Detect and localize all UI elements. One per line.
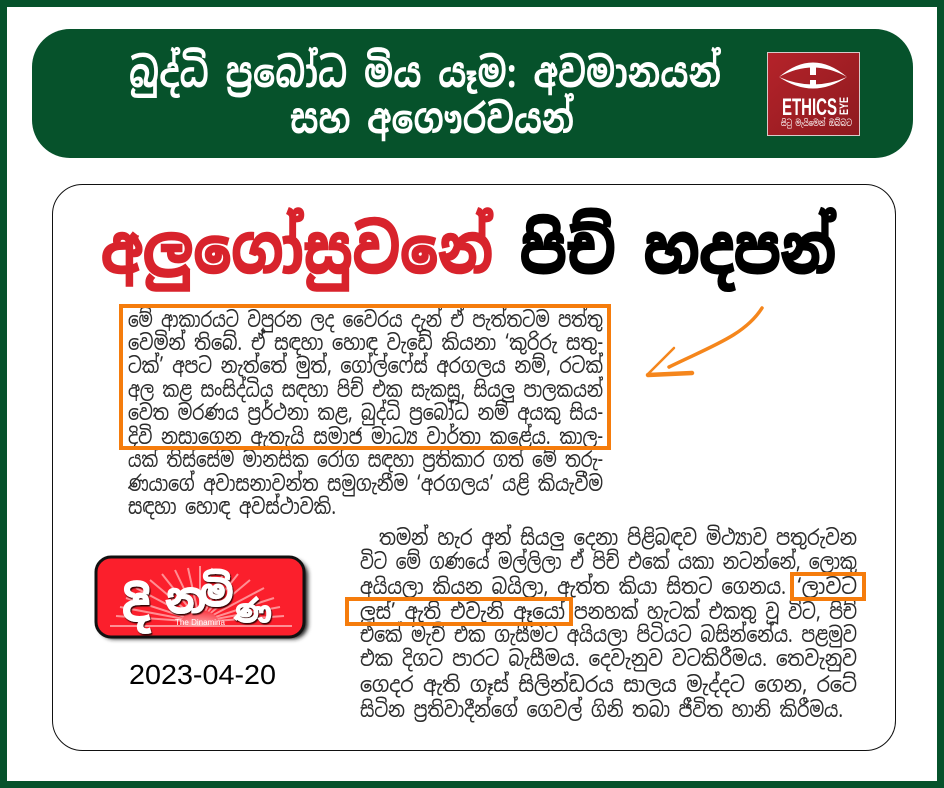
first article paragraph: යක් තිස්සේම මානසික රෝග සඳහා ප්‍රතිකාර ගත් මේ තරු- xyxy=(128,446,603,474)
second article paragraph: ‘ලාවට xyxy=(797,574,857,601)
main panel xyxy=(52,184,896,750)
logo: Ethics Eye: EYE xyxy=(837,97,851,115)
newspaper logo: Dinamina: දි xyxy=(122,575,151,635)
first article paragraph: මේ ආකාරයට වපුරන ලද වෛරය දැන් ඒ පැත්තටම පත්තු xyxy=(128,306,603,334)
second article paragraph: සිටින ප්‍රතිවාදීන්ගේ ගෙවල් ගිනි තබා ජීවිත හානි කිරීමය. xyxy=(360,696,843,724)
logo: Ethics Eye: සිටු මැයිමෙන් ඔබ්බට xyxy=(781,117,852,129)
second article paragraph: එක දිගට පාරට බැසීමය. දෙවැනුව වටකිරීමය. තෙවැනුව xyxy=(360,645,857,673)
second article paragraph: තමන් හැර අන් සියලු දෙනා පිළිබඳව මිථ්‍යාව පතුරුවන xyxy=(379,524,857,552)
date: 2023-04-20 xyxy=(129,659,276,690)
second article paragraph: ගෙදර ඇති ගෑස් සිලින්ඩරය සාලය මැද්දට ගෙන, රටේ xyxy=(360,671,857,699)
headline: අලුගෝසුවනේ xyxy=(101,207,493,293)
highlight box around first paragraph xyxy=(121,306,609,448)
newspaper logo: Dinamina: මි xyxy=(200,568,233,618)
newspaper logo: Dinamina: The Dinamina xyxy=(175,618,226,627)
first article paragraph: වෙමින් තිබේ. ඒ සඳහා හොඳ වැඩේ කියනා ‘කුරිරු සතු- xyxy=(128,329,603,357)
first article paragraph xyxy=(127,306,604,521)
second article paragraph: අයියලා කියන බයිලා, ඇත්ත කියා සිතට ගෙනය. xyxy=(360,573,786,601)
newspaper logo: Dinamina: න xyxy=(165,572,206,626)
first article paragraph: දිවි නසාගෙන ඇතැයි සමාජ මාධ්‍ය වාර්තා කළේය. කාල- xyxy=(128,423,603,451)
hand-drawn arrow xyxy=(648,308,762,375)
title: සහ අගෞරවයන් xyxy=(290,92,575,146)
second article paragraph: ලූස්’ ඇති එවැනි ඈයෝ xyxy=(360,598,566,626)
headline: පිච් හදපන් xyxy=(520,207,836,293)
first article paragraph: ටක්’ අපට නැත්තේ මුත්, ගෝල්ෆේස් අරගලය නම්, රටක් xyxy=(128,352,604,380)
header banner xyxy=(32,29,913,158)
highlight box: phrase end xyxy=(347,599,571,624)
title: බුද්ධි ප්‍රබෝධ මිය යෑම: අවමානයන් xyxy=(129,46,722,100)
logo: Ethics Eye: ETHICS xyxy=(782,94,837,121)
newspaper logo: Dinamina: ණ xyxy=(233,592,272,631)
first article paragraph: අල කළ සංසිද්ධිය සඳහා පිච් එක සැකසූ, සියලු පාලකයන් xyxy=(128,376,604,404)
first article paragraph: වෙත මරණය ප්‍රර්ථනා කළ, බුද්ධි ප්‍රබෝධ නම් අයකු සිය- xyxy=(128,399,603,427)
highlight box: phrase start xyxy=(792,574,864,599)
title xyxy=(129,46,722,146)
first article paragraph: සඳහා හොඳ අවස්ථාවකි. xyxy=(128,493,336,521)
first article paragraph: ණයාගේ අවාසනාවන්ත සමුගැනීම ‘අරගලය’ යළි කියැවීම xyxy=(127,470,603,498)
logo: Ethics Eye xyxy=(768,52,860,136)
second article paragraph xyxy=(360,524,857,724)
second article paragraph: පනහක් හැටක් එකතු වූ විට, පිච් xyxy=(574,598,857,626)
newspaper logo: Dinamina xyxy=(96,557,308,639)
headline xyxy=(101,207,836,293)
